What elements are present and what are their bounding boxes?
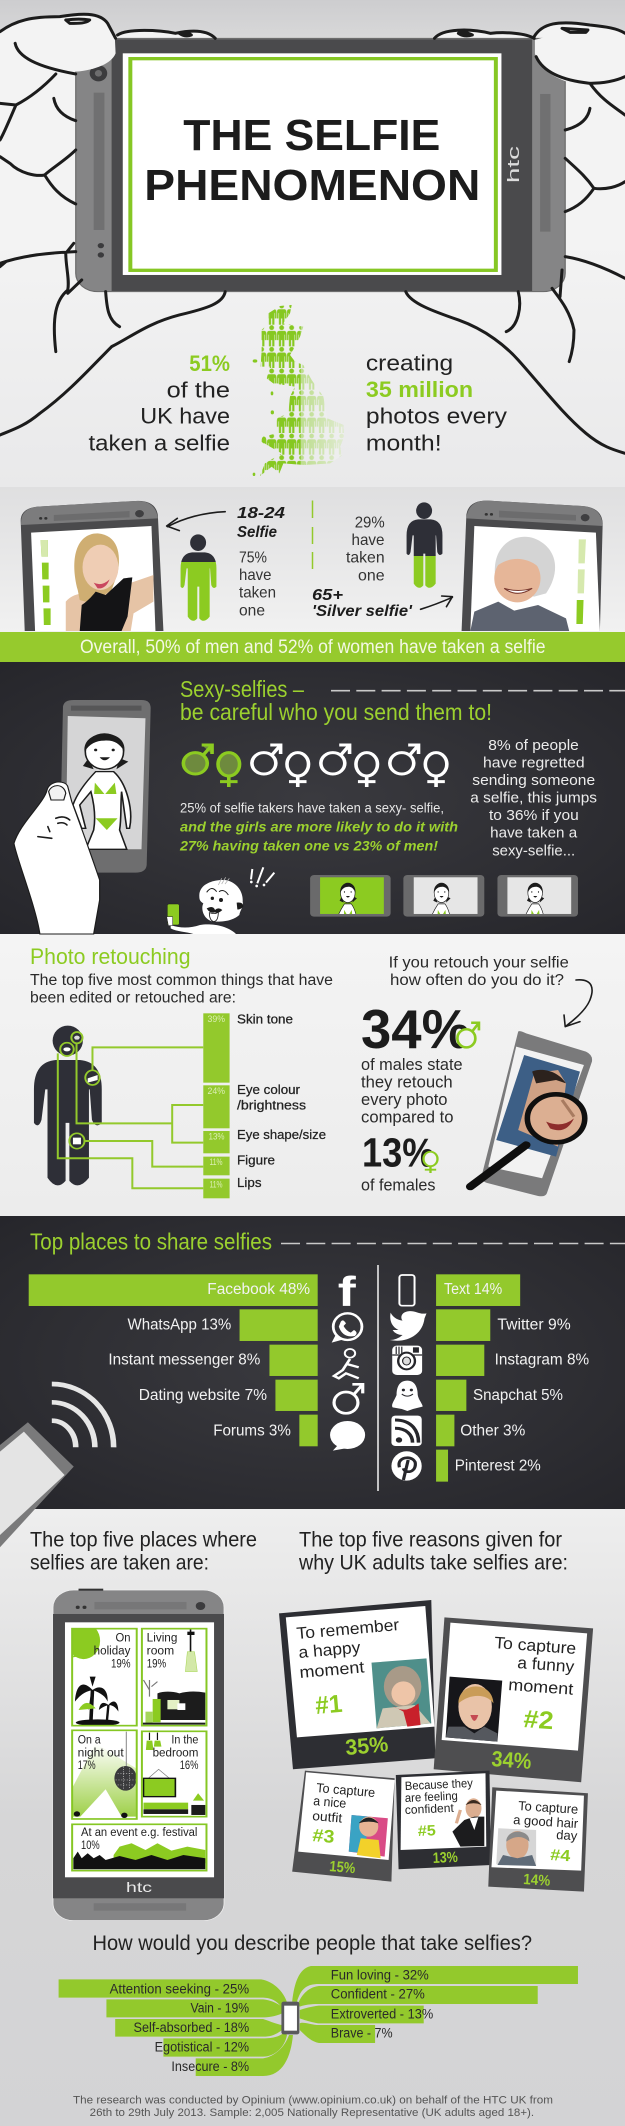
stat: 13% of females bbox=[361, 1130, 437, 1195]
labels: negative descriptors: Insecure - 8% bbox=[171, 2059, 249, 2074]
text: how often question bbox=[389, 955, 569, 989]
cell label: living room: Living bbox=[147, 1633, 177, 1645]
bar chart: right share places: Text 14% bbox=[444, 1281, 502, 1298]
heading: sexy-selfies: Sexy-selfies – bbox=[180, 676, 304, 702]
labels: negative descriptors: Egotistical - 12% bbox=[155, 2040, 249, 2055]
bar chart: left share places: Dating website 7% bbox=[139, 1387, 267, 1404]
polaroid: reason 4: 14% bbox=[523, 1871, 551, 1890]
text: top five edits intro: been edited or retouched are: bbox=[30, 990, 236, 1007]
text: 25% of selfie takers: and the girls are more likely to do it with bbox=[180, 819, 458, 835]
heading: top five places: The top five places where bbox=[30, 1529, 257, 1552]
polaroid: reason 3: a nice bbox=[313, 1793, 347, 1811]
labels: positive descriptors: Fun loving - 32% bbox=[331, 1967, 429, 1982]
bar chart: right share places: Snapchat 5% bbox=[473, 1387, 563, 1404]
cell art: bedroom bbox=[143, 1733, 205, 1815]
text: 51% of UK bbox=[88, 351, 230, 455]
heading: top five places bbox=[30, 1529, 257, 1574]
banner: overall gender statistic bbox=[0, 632, 625, 662]
panel: age comparison background bbox=[0, 487, 625, 632]
bar chart: right share places: Pinterest 2% bbox=[455, 1458, 541, 1475]
heading: sexy-selfies bbox=[180, 676, 492, 725]
polaroid: reason 5 bbox=[396, 1771, 491, 1869]
text: 51% of UK: UK have bbox=[140, 404, 230, 429]
polaroid: reason 3: #3 bbox=[312, 1825, 335, 1847]
labels: retouched features: /brightness bbox=[237, 1097, 307, 1112]
text: 75% have taken one: taken bbox=[239, 585, 276, 602]
diagram: body silhouette with connectors bbox=[34, 1026, 203, 1188]
heading: top five reasons bbox=[298, 1529, 568, 1574]
cell label: on holiday: holiday bbox=[94, 1645, 131, 1657]
divider: dashed green bbox=[312, 500, 314, 569]
cell label: bedroom: bedroom bbox=[153, 1747, 198, 1759]
polaroid: reason 3: To capture bbox=[316, 1780, 376, 1800]
labels: retouched features: Eye colour bbox=[237, 1082, 301, 1097]
polaroid: reason 4 bbox=[488, 1787, 588, 1892]
cell label: festival bbox=[81, 1827, 197, 1852]
text: 75% have taken one: have bbox=[239, 567, 272, 584]
heading: sexy-selfies: be careful who you send them to! bbox=[180, 699, 492, 725]
text: 25% of selfie takers: 25% of selfie takers have taken a sexy- selfie, bbox=[180, 800, 444, 815]
heading: the selfie phenomenon: THE SELFIE bbox=[183, 111, 440, 160]
divider: vertical bbox=[377, 1265, 379, 1491]
text: 8% regretted: have taken a bbox=[490, 825, 578, 842]
arrow: question to phone bbox=[564, 980, 592, 1027]
icon: wifi signal arcs bbox=[52, 1384, 114, 1447]
icons: left share services: f bbox=[338, 1268, 357, 1315]
text: 29% have taken one: one bbox=[358, 568, 385, 585]
polaroid: reason 1: #1 bbox=[314, 1690, 344, 1720]
text: top five edits intro bbox=[30, 972, 333, 1007]
person figure: 75% bbox=[181, 534, 216, 621]
panel: sexy selfies background bbox=[0, 662, 625, 934]
text: 75% have taken one bbox=[239, 550, 276, 619]
polaroid: reason 1: a happy bbox=[298, 1639, 362, 1662]
phone: older woman selfie bbox=[462, 501, 603, 631]
panel: photo retouching background bbox=[0, 934, 625, 1216]
heading: top places to share: Top places to share selfies bbox=[30, 1228, 272, 1254]
text: 29% have taken one: have bbox=[352, 532, 385, 549]
footer: research source bbox=[73, 2094, 553, 2119]
labels: retouched features: Skin tone bbox=[237, 1011, 293, 1026]
stat: 34% of males: every photo bbox=[361, 1090, 448, 1109]
stat: 13% of females: of females bbox=[361, 1176, 436, 1195]
polaroid: reason 5: 13% bbox=[432, 1849, 458, 1867]
polaroid: reason 3: outfit bbox=[312, 1808, 343, 1826]
cell label: on holiday: On bbox=[116, 1633, 130, 1645]
labels: retouched features: Figure bbox=[237, 1153, 275, 1168]
banner: overall gender statistic: Overall, 50% of men and 52% of women have taken a selfie bbox=[80, 637, 546, 658]
labels: negative descriptors: Self-absorbed - 18% bbox=[134, 2020, 249, 2035]
text: 8% regretted: sexy-selfie... bbox=[492, 843, 575, 860]
polaroid: reason 1: moment bbox=[299, 1658, 366, 1682]
heading: the selfie phenomenon: PHENOMENON bbox=[144, 161, 480, 210]
text: 29% have taken one bbox=[346, 514, 385, 585]
stat: 34% of males: they retouch bbox=[361, 1073, 453, 1092]
text: phone brand: htc bbox=[126, 1879, 152, 1895]
polaroid: reason 3: 15% bbox=[329, 1858, 356, 1877]
text: 8% regretted: to 36% if you bbox=[489, 807, 579, 824]
cell label: night out: night out bbox=[78, 1747, 125, 1759]
label: 18-24 selfie bbox=[237, 505, 285, 541]
polaroid: reason 5: Because they bbox=[405, 1776, 473, 1793]
illustration: hand holding phone with bikini girl bbox=[14, 700, 151, 934]
polaroid: reason 2: moment bbox=[508, 1676, 574, 1699]
text: 75% have taken one: 75% bbox=[239, 550, 267, 567]
cell label: living room: 19% bbox=[147, 1658, 166, 1670]
labels: retouched features: Lips bbox=[237, 1175, 262, 1190]
polaroid: reason 5: confident bbox=[405, 1801, 455, 1817]
bar chart: retouching stats: 39% bbox=[208, 1014, 225, 1024]
cell label: festival: At an event e.g. festival bbox=[81, 1827, 197, 1839]
bar chart: left share places: Facebook 48% bbox=[207, 1281, 310, 1298]
bar chart: retouching stats: 13% bbox=[208, 1131, 224, 1141]
icons: gender symbols row bbox=[183, 745, 447, 787]
panel: lower section background bbox=[0, 1509, 625, 2126]
labels: negative descriptors: Attention seeking - 25% bbox=[110, 1981, 249, 1996]
text: 35 million photos: photos every bbox=[366, 404, 507, 429]
text: 35 million photos bbox=[366, 351, 507, 455]
labels: positive descriptors: Brave - 7% bbox=[331, 2026, 393, 2041]
cell label: festival: 10% bbox=[81, 1840, 100, 1852]
cell art: on holiday bbox=[72, 1628, 120, 1726]
person figure: 29% bbox=[407, 502, 442, 588]
text: 8% regretted bbox=[470, 737, 597, 860]
text: how often question: how often do you do it? bbox=[390, 972, 564, 989]
label: 65+ silver selfie: 'Silver selfie' bbox=[312, 603, 413, 620]
labels: positive descriptors: Extroverted - 13% bbox=[331, 2006, 433, 2021]
bar chart: left share places: Instant messenger 8% bbox=[108, 1352, 261, 1369]
labels: positive descriptors: Confident - 27% bbox=[331, 1987, 425, 2002]
label: 18-24 selfie: 18-24 bbox=[237, 505, 285, 522]
polaroid: reason 5: are feeling bbox=[405, 1789, 458, 1805]
text: 8% regretted: 8% of people bbox=[488, 737, 579, 754]
cell label: on holiday bbox=[94, 1633, 131, 1670]
cell label: night out: On a bbox=[78, 1735, 101, 1747]
text: 8% regretted: have regretted bbox=[483, 755, 585, 772]
text: brand on header phone: htc bbox=[504, 145, 523, 183]
label: 18-24 selfie: Selfie bbox=[237, 524, 277, 541]
labels: negative descriptors: Vain - 19% bbox=[190, 2001, 249, 2016]
cell label: bedroom bbox=[153, 1735, 198, 1772]
cell label: bedroom: In the bbox=[171, 1735, 198, 1747]
text: 25% of selfie takers: 27% having taken one vs 23% of men! bbox=[179, 838, 438, 854]
label: 65+ silver selfie: 65+ bbox=[312, 587, 343, 604]
polaroid: reason 4: #4 bbox=[550, 1847, 571, 1865]
stat: 13% of females: 13% bbox=[362, 1130, 434, 1176]
bar chart: retouching stats: 11% bbox=[210, 1157, 222, 1167]
polaroid: reason 1: 35% bbox=[344, 1731, 389, 1760]
bar chart: retouching stats bbox=[203, 1013, 230, 1198]
illustration: shocked baby taking selfie bbox=[167, 867, 274, 934]
phone: young woman selfie bbox=[21, 501, 163, 631]
bar chart: right share places: Twitter 9% bbox=[497, 1316, 571, 1333]
text: 35 million photos: creating bbox=[366, 351, 453, 376]
text: 8% regretted: sending someone bbox=[472, 772, 595, 789]
bar chart: retouching stats: 24% bbox=[208, 1086, 225, 1096]
illustration: phone with magnifier bbox=[470, 1031, 592, 1196]
heading: photo retouching: Photo retouching bbox=[30, 944, 190, 969]
heading: describe people: How would you describe people that take selfies? bbox=[92, 1932, 532, 1955]
arrow: to young woman phone bbox=[167, 512, 225, 531]
panel: header background bbox=[0, 0, 625, 487]
polaroid: reason 4: day bbox=[556, 1827, 578, 1843]
cell label: night out bbox=[78, 1735, 125, 1772]
panel: share places background bbox=[0, 1216, 625, 1509]
cell label: bedroom: 16% bbox=[180, 1760, 198, 1772]
illustration: phone held by two hands bbox=[0, 14, 625, 453]
labels: positive descriptors bbox=[331, 1967, 433, 2041]
polaroid: reason 2: a funny bbox=[517, 1654, 576, 1676]
stat: 34% of males bbox=[361, 998, 479, 1127]
bar chart: retouching stats: 11% bbox=[210, 1179, 222, 1189]
footer: research source: 26th to 29th July 2013. Sample: 2,005 Nationally Representative (UK adults aged 18+). bbox=[90, 2107, 534, 2119]
cell art: festival bbox=[73, 1843, 205, 1869]
phone: five locations bbox=[53, 1589, 224, 1921]
heading: top five reasons: why UK adults take selfies are: bbox=[298, 1551, 568, 1574]
polaroid: reason 1: To remember bbox=[296, 1616, 400, 1643]
polaroid: reason 4: a good hair bbox=[513, 1812, 579, 1831]
text: 8% regretted: a selfie, this jumps bbox=[470, 790, 597, 807]
text: 25% of selfie takers bbox=[179, 800, 458, 854]
illustration: tilted phone corner bbox=[0, 1422, 74, 1547]
bar chart: left share places: Forums 3% bbox=[213, 1422, 291, 1439]
text: top five edits intro: The top five most common things that have bbox=[30, 972, 333, 989]
polaroid: reason 2 bbox=[434, 1617, 593, 1782]
text: 35 million photos: month! bbox=[366, 430, 442, 455]
polaroid: reason 1 bbox=[279, 1600, 435, 1769]
diagram: descriptor ribbons from phone bbox=[59, 1966, 578, 2076]
heading: top five reasons: The top five reasons given for bbox=[299, 1529, 562, 1552]
polaroid: reason 2: To capture bbox=[494, 1634, 577, 1658]
label: 65+ silver selfie bbox=[312, 587, 413, 620]
stat: 34% of males: 34% bbox=[361, 998, 470, 1060]
bar chart: left share places: WhatsApp 13% bbox=[128, 1316, 231, 1333]
cell label: living room bbox=[147, 1633, 177, 1670]
stat: 34% of males: of males state bbox=[361, 1055, 463, 1074]
text: 29% have taken one: 29% bbox=[355, 514, 385, 531]
stat: 34% of males: compared to bbox=[361, 1108, 454, 1127]
icons: left share services bbox=[330, 1268, 365, 1451]
map: UK filled with people icons bbox=[252, 305, 344, 476]
heading: the selfie phenomenon bbox=[144, 111, 480, 210]
polaroid: reason 3 bbox=[292, 1771, 395, 1882]
cell label: on holiday: 19% bbox=[111, 1658, 130, 1670]
text: 51% of UK: of the bbox=[167, 377, 230, 402]
polaroid: reason 2: #2 bbox=[523, 1705, 555, 1735]
bar chart: right share places: Instagram 8% bbox=[495, 1352, 589, 1369]
cell label: night out: 17% bbox=[78, 1760, 96, 1772]
text: 51% of UK: taken a selfie bbox=[88, 430, 230, 455]
text: 51% of UK: 51% bbox=[189, 351, 230, 376]
thumbnails: three phones sharing the image bbox=[310, 875, 578, 947]
icons: right share services bbox=[390, 1275, 427, 1481]
bar chart: left share places bbox=[29, 1274, 318, 1446]
heading: top five places: selfies are taken are: bbox=[30, 1551, 209, 1574]
arrow: to older woman phone bbox=[421, 596, 452, 609]
bar chart: right share places bbox=[436, 1274, 589, 1482]
polaroid: reason 4: To capture bbox=[518, 1798, 579, 1817]
labels: negative descriptors bbox=[110, 1981, 249, 2074]
labels: retouched features bbox=[237, 1011, 326, 1190]
text: how often question: If you retouch your selfie bbox=[389, 955, 569, 972]
footer: research source: The research was conducted by Opinium (www.opinium.co.uk) on behalf of the HTC UK from bbox=[73, 2094, 553, 2106]
polaroid: reason 2: 34% bbox=[491, 1746, 532, 1774]
bar chart: right share places: Other 3% bbox=[460, 1422, 526, 1439]
polaroid: reason 5: #5 bbox=[417, 1822, 436, 1840]
text: 35 million photos: 35 million bbox=[366, 377, 473, 402]
cell art: night out bbox=[73, 1732, 137, 1818]
cell art: living room bbox=[143, 1629, 205, 1725]
text: 75% have taken one: one bbox=[239, 602, 265, 619]
cell label: living room: room bbox=[147, 1645, 174, 1657]
text: 29% have taken one: taken bbox=[346, 550, 385, 567]
labels: retouched features: Eye shape/size bbox=[237, 1127, 326, 1142]
